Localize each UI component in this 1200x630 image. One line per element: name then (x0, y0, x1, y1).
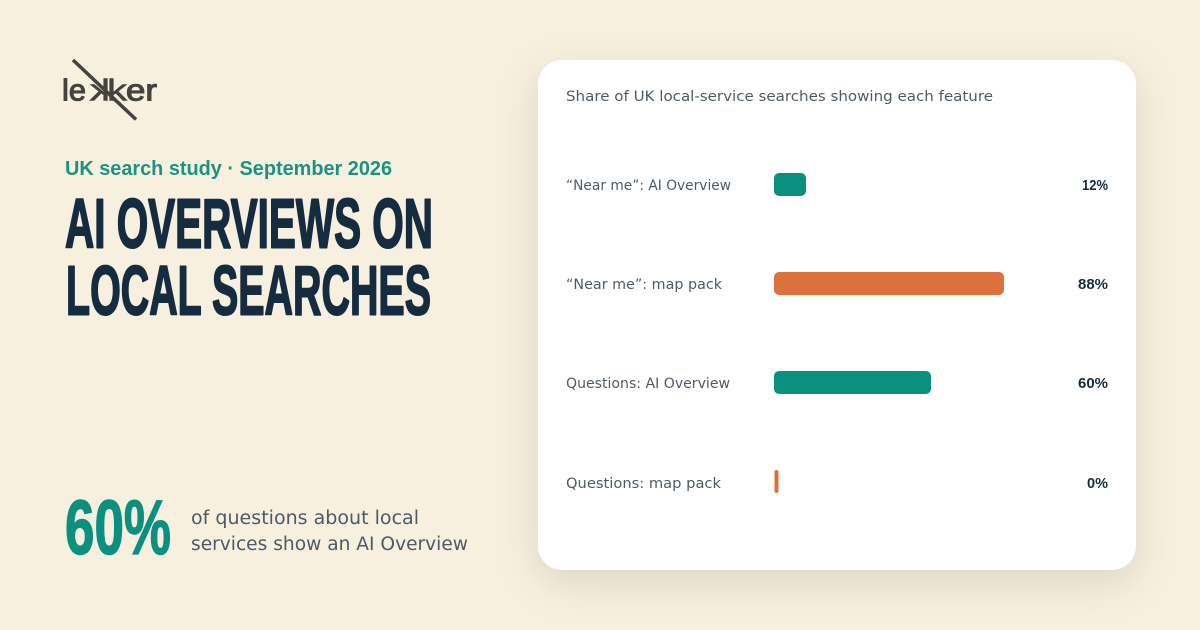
logo: lekker (62, 60, 157, 120)
key statistic: 60% (65, 485, 468, 571)
stat description: of questions about local (191, 508, 419, 529)
title: LOCAL SEARCHES (66, 252, 431, 330)
stat description: services show an AI Overview (191, 534, 468, 555)
stat description (191, 508, 468, 555)
row: questions AI Overview (566, 371, 1108, 394)
logo: lekker: k (89, 72, 110, 107)
title (65, 184, 433, 330)
stat number: 60% (65, 485, 171, 571)
row: near me map pack: “Near me”: map pack (566, 277, 723, 293)
chart heading: Share of UK local-service searches showing each feature (566, 89, 993, 105)
row: questions AI Overview: 60% (1078, 376, 1108, 392)
row: questions map pack: 0% (1087, 476, 1108, 492)
title: AI OVERVIEWS ON (65, 184, 433, 262)
row: questions map pack: Questions: map pack (566, 476, 722, 492)
row: near me AI Overview (566, 173, 1108, 196)
logo: lekker: k (107, 72, 128, 107)
row: near me map pack: 88% (1078, 277, 1108, 293)
eyebrow: study label: UK search study · September 2026 (65, 158, 392, 180)
panel: bar chart card (538, 60, 1136, 570)
row: near me map pack (566, 272, 1108, 295)
logo: lekker: er (126, 72, 157, 108)
row: questions map pack (566, 470, 1108, 493)
row: near me AI Overview: 12% (1082, 178, 1108, 194)
row: near me AI Overview: “Near me”: AI Overview (566, 178, 731, 194)
logo: lekker: le (62, 72, 86, 108)
row: questions AI Overview: Questions: AI Overview (566, 376, 730, 392)
